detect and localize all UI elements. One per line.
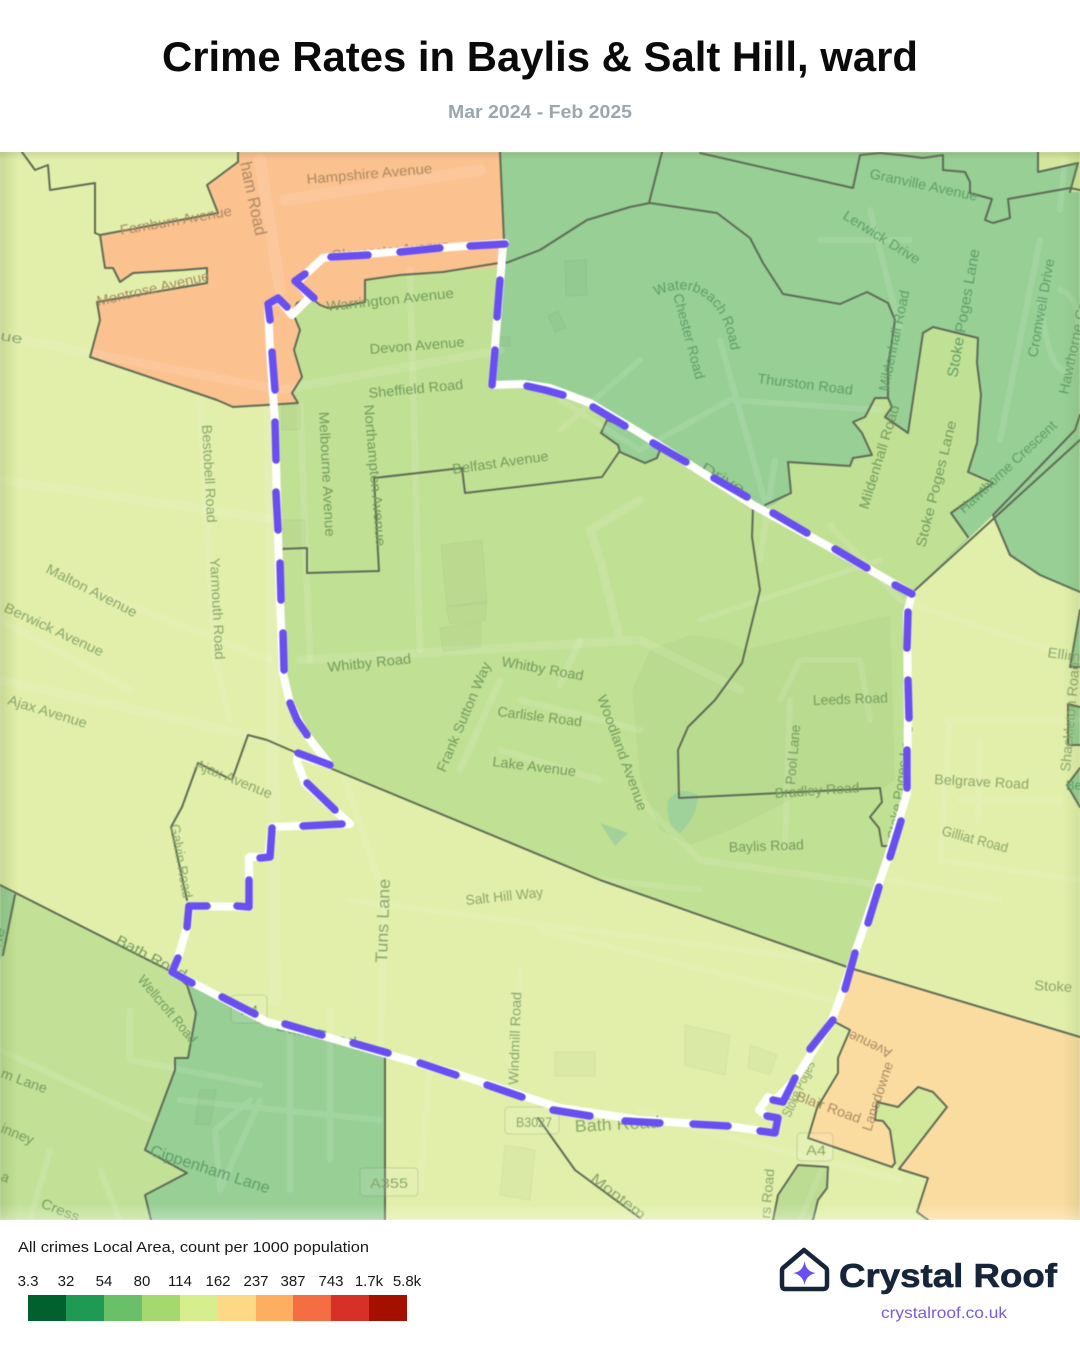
street labels: green zones: Thurston Road [757,370,854,398]
street labels: green zones: Bath Road [574,1113,660,1136]
street labels: central zone: Mildenhall Road [856,403,902,511]
street labels: pale zone: rs Road [757,1168,777,1219]
pond [668,791,698,833]
legend colour bar [28,1295,407,1321]
east slivers [1068,617,1080,805]
street labels: pale zone: ue [0,327,24,347]
street labels: green zones: Lerwick Drive [840,207,924,267]
street labels: pale zone: Stoke [1034,977,1073,995]
street labels: central zone: Stoke Poges Lane [912,418,959,549]
street labels: central zone: Melbourne Avenue [316,411,339,537]
zone: bottom green blob [773,1165,828,1220]
street labels: central zone: Whitby Road [327,650,412,675]
street labels: pale zone: Ajax Avenue [193,756,275,802]
map base area [0,152,1080,1220]
street labels: orange zone: Blair Road [794,1088,863,1126]
street labels: green zones: Chester Road [670,292,708,381]
road shields [231,995,833,1196]
legend scale values: 5.8k [393,1273,422,1290]
street labels: central zone: Drive [698,459,748,497]
park shading [632,615,895,845]
street labels: central zone: Whitby Road [500,653,585,683]
zone: central ward area [275,262,993,968]
legend scale values: 80 [134,1273,150,1290]
zone: north-east corner [1038,152,1080,192]
street labels: green zones: Granville Avenue [868,165,980,204]
street labels: orange zone: Avenue [846,1028,894,1062]
street labels: orange zone: Gloucester Avenue [331,237,450,263]
street labels: central zone: Bath Road [114,932,190,982]
street labels: green zones: Cromwell Drive [1024,257,1057,359]
street labels: pale zone: Galvin Road [167,823,196,899]
road network [0,160,1080,1220]
street labels: pale zone: Montem [588,1170,649,1222]
legend scale values: 162 [205,1273,231,1290]
legend scale values [18,1273,422,1290]
street labels: central zone: Devon Avenue [369,334,465,357]
street labels: central zone [0,285,959,1225]
legend scale values: 743 [318,1273,344,1290]
map panel [0,152,1080,1220]
street labels: pale zone [0,327,1080,1222]
zone boundary lines [0,152,1080,1220]
legend scale values: 54 [96,1273,112,1290]
legend scale values: 32 [58,1273,74,1290]
street labels: green zones: Mildenhall Road [875,289,912,393]
street labels: orange zone: Hampshire Avenue [306,160,433,187]
street labels: pale zone: Yarmouth Road [207,557,228,660]
street labels: central zone: Lake Avenue [492,753,577,779]
street labels: green zones: Waterbeach Road [652,280,741,350]
street labels: pale zone: Tuns Lane [372,879,394,963]
legend scale values: 1.7k [355,1273,384,1290]
street labels: central zone: Warrington Avenue [326,285,455,314]
street labels: central zone: Carlisle Road [497,703,583,729]
street labels: green zones: Stoke Poges Lane [944,248,984,379]
legend [18,1239,422,1321]
logo: Crystal Roof [782,1250,1058,1322]
map edge shading [0,152,1080,1220]
street labels: pale zone: A4 [806,1142,826,1158]
street labels: pale zone: B3027 [516,1114,552,1130]
street labels: pale zone: Ellim [1047,644,1080,665]
street labels: green zones: Hawthorne Crescent [955,417,1060,516]
street labels: central zone: Cress [39,1195,82,1225]
street labels: orange zone: Montrose Avenue [95,267,211,309]
icon: house with star [782,1250,827,1289]
street labels: orange zone: Lansdowne [859,1059,896,1133]
zone: south-west green area [0,885,196,1220]
legend scale values: 387 [280,1273,306,1290]
street labels: orange zone: ham Road [236,160,270,237]
zone: small pocket [875,1087,947,1169]
street labels: central zone: Belfast Avenue [451,448,550,477]
street labels: pale zone: Windmill Road [505,992,524,1085]
street labels: pale zone: Stoke Poges [778,1058,818,1119]
street labels: central zone: Northampton Avenue [361,404,389,547]
street labels: central zone: Wellcroft Road [135,972,201,1046]
street labels: pale zone: A355 [370,1175,408,1191]
zone: north-east low crime area [491,152,1080,592]
street labels: central zone: Stoke Poges Lane [884,724,916,840]
logo wordmark: Crystal Roof [839,1257,1058,1294]
legend title: All crimes Local Area, count per 1000 population [18,1239,369,1256]
street labels: pale zone: Ajax Avenue [6,692,89,731]
subtitle: date range: Mar 2024 - Feb 2025 [448,101,632,122]
street labels: orange zone [95,160,896,1133]
ward boundary: white line [172,243,912,1133]
street labels: pale zone: Belgrave Road [934,771,1030,792]
street labels: green zones: Bath Road [274,1017,358,1050]
street labels: orange zone: Farnburn Avenue [119,203,233,238]
zone: south low crime block [145,985,385,1220]
zone: west edge sliver [0,885,15,960]
street labels: pale zone: Salt Hill Way [465,884,544,908]
street labels: green zones: A4 [241,1002,258,1018]
street labels: central zone: Bradley Road [774,779,860,801]
street labels: pale zone: Malton Avenue [44,560,140,620]
ward boundary: purple dashes [172,244,912,1133]
street labels: green zones [0,169,1080,1193]
title: Crime Rates in Baylis & Salt Hill, ward [162,33,918,80]
logo website: crystalroof.co.uk [881,1305,1008,1322]
street labels: central zone: Leeds Road [813,689,888,708]
zone: south-east light orange area [808,968,1080,1220]
street labels: pale zone: Gilliat Road [940,822,1010,855]
legend scale values: 114 [168,1273,192,1290]
street labels: central zone: Baylis Road [729,836,804,855]
legend scale values: 237 [243,1273,269,1290]
zone: orange high crime area [90,152,505,407]
legend scale values: 3.3 [18,1273,38,1290]
street labels: central zone: m Lane [0,1065,50,1096]
pond triangle [600,823,628,846]
notch zone [601,420,660,463]
street labels: green zones: Cippenham Lane [148,1143,272,1197]
street labels: central zone: Sheffield Road [368,376,464,401]
street labels: pale zone: Berwick Avenue [2,599,107,659]
street labels: central zone: Woodland Avenue [594,693,651,813]
street labels: central zone: Frank Sutton Way [433,659,494,774]
street labels: pale zone: Bestobell Road [199,424,220,523]
buildings and pitches [195,260,777,1200]
street labels: central zone: Pool Lane [782,724,803,785]
